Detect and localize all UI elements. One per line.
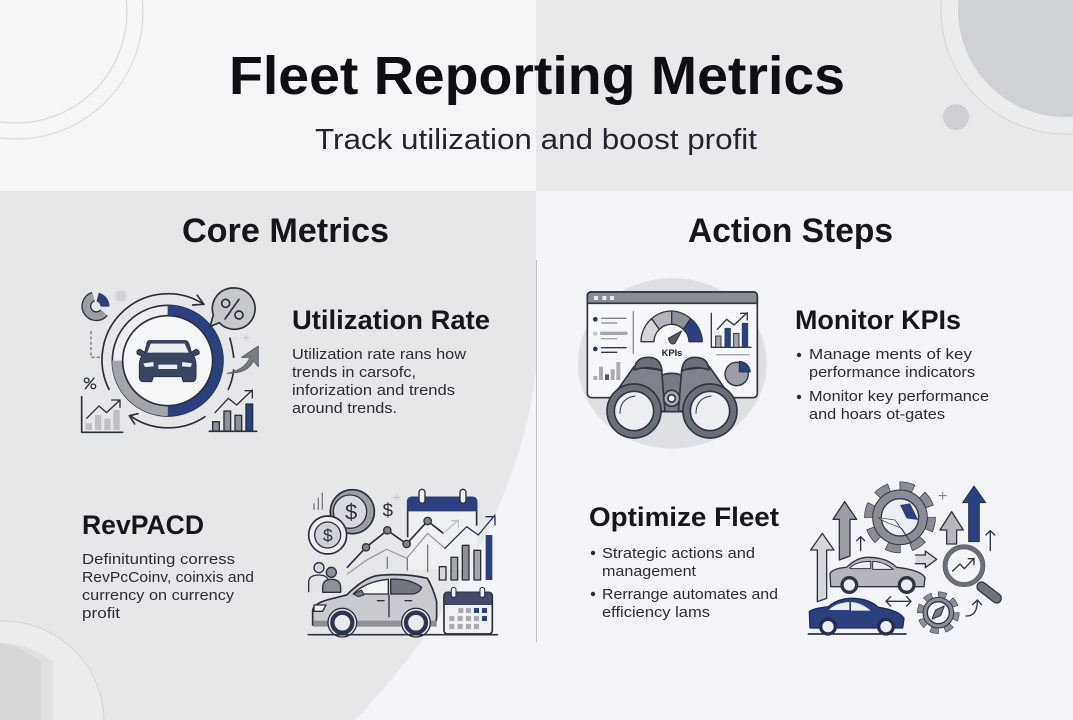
heading: action steps: Action Steps [688,212,893,250]
heading: core metrics: Core Metrics [182,212,389,250]
metric description: Utilization rate rans how [292,347,467,363]
blue car [809,598,904,634]
compass gear [921,595,956,630]
metric: utilization rate [292,305,490,417]
step bullets: and hoars ot-gates [809,407,945,423]
step bullets: Rerrange automates and [602,587,778,603]
icon: KPI dashboard with binoculars [578,278,767,449]
lower background [0,191,1073,720]
metric description: RevPcCoinv, coinxis and [82,570,254,586]
panel: core metrics [82,212,497,637]
step bullets: efficiency lams [602,605,710,621]
metric description: trends in carsofc, [292,365,416,381]
header background [0,0,1073,191]
subtitle: Track utilization and boost profit [315,124,757,156]
step bullets [797,347,989,423]
metric: RevPACD [82,510,254,622]
grey car [830,557,925,592]
step heading: Optimize Fleet [589,502,779,532]
binoculars [607,357,737,438]
icon: revenue chart with car: $ [383,499,394,520]
step bullets: management [602,564,696,580]
icon: KPI dashboard with binoculars: KPIs [662,348,682,358]
metric description: Definitunting corress [82,552,235,568]
metric description: inforization and trends [292,383,455,399]
metric description: around trends. [292,401,397,417]
metric heading: RevPACD [82,510,204,540]
step bullets: Strategic actions and [602,546,755,562]
step bullets: performance indicators [809,365,975,381]
icon: revenue chart with car [308,489,497,637]
gear [869,487,931,548]
step bullets [591,546,778,621]
metric heading: Utilization Rate [292,305,490,335]
icon: revenue chart with car: $ [323,525,333,545]
gauge [641,311,702,344]
step: monitor KPIs [795,305,989,423]
step bullets: Monitor key performance [809,389,989,405]
icon: revenue chart with car: $ [345,500,357,525]
metric description: profit [82,606,120,622]
step bullets: Manage ments of key [809,347,973,363]
icon: fleet optimization [808,486,997,634]
metric description [82,552,254,622]
panel: action steps [578,212,997,634]
icon: utilization ring with car [82,288,258,432]
step: optimize fleet [589,502,779,621]
magnifier [943,545,997,598]
car [137,341,199,382]
title: Fleet Reporting Metrics [229,46,845,106]
metric description [292,347,467,417]
step heading: Monitor KPIs [795,305,961,335]
metric description: currency on currency [82,588,235,604]
car [313,575,437,637]
center divider [536,260,537,642]
